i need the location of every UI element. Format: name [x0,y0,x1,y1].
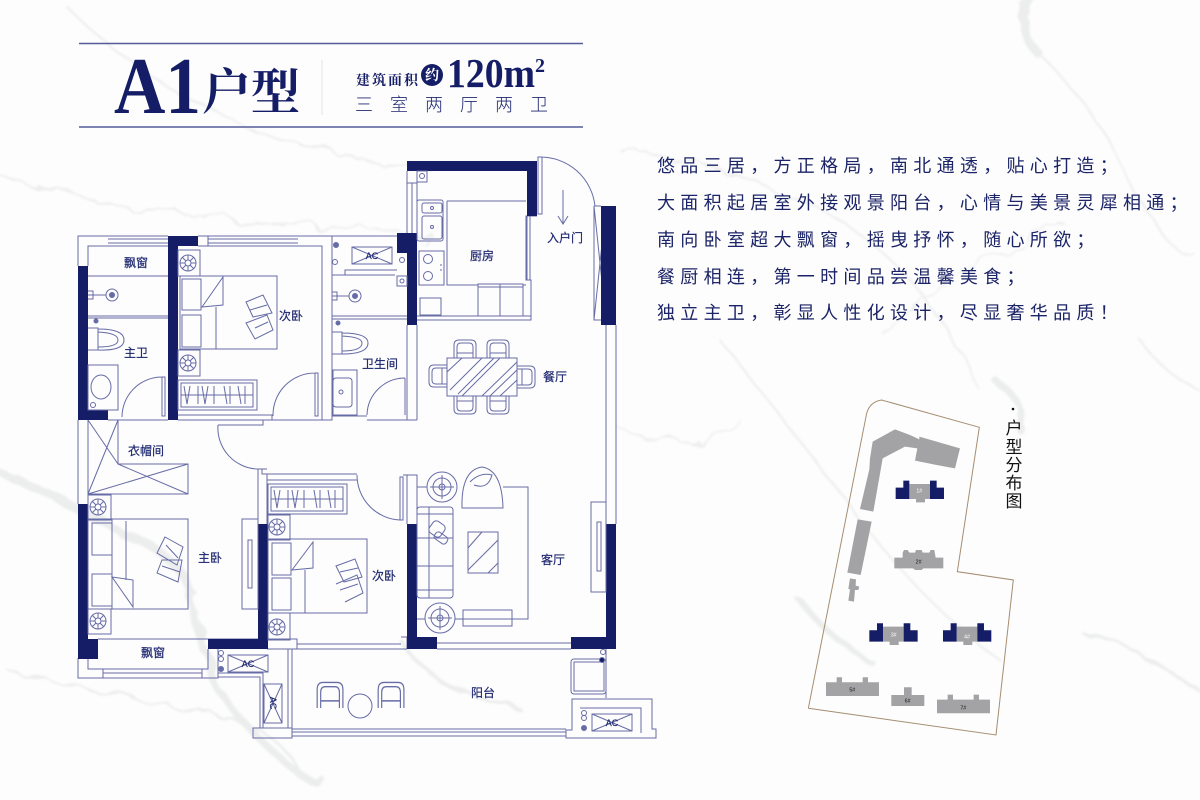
description text: 悠品三居，方正格局，南北通透，贴心打造； [657,156,1123,176]
bed: north bedroom [178,250,277,410]
building area label: 建筑面积 [356,72,420,89]
entry arrow [558,190,568,224]
heading: unit type: 户型 [202,65,300,120]
site plan caption: 户 [1006,419,1022,438]
site plan caption: 图 [1006,492,1022,511]
walk-in closet [88,420,188,494]
description text: 独立主卫，彰显人性化设计，尽显奢华品质！ [657,303,1123,323]
washer and AC units [218,650,632,731]
building 7: 7# [960,705,966,711]
room labels: 主卧 [198,551,222,565]
badge: approx: 约 [425,67,439,84]
room labels: 飘窗 [124,256,148,270]
title block [79,43,583,131]
building 5: 5# [849,688,855,694]
room labels: 阳台 [471,685,495,700]
building 4 [943,623,991,645]
doors [122,373,405,520]
room labels: 次卧 [279,309,303,323]
room labels: 主卫 [124,346,148,360]
room labels: 卫生间 [362,357,398,371]
room labels: AC [268,697,278,710]
building 7 [937,695,990,713]
second bathroom fixtures [332,242,407,415]
wall outlines [78,157,656,738]
living room furniture [417,467,606,633]
heading: A1: A1 [114,43,201,131]
building 2 [894,550,943,570]
building 1: 1# [916,489,922,495]
building 2: 2# [916,559,922,565]
room labels: 飘窗 [141,646,165,660]
building 4: 4# [964,635,970,641]
building 6: 6# [905,699,911,705]
site plan caption: 布 [1006,474,1022,493]
solid walls [78,161,616,659]
perimeter buildings [847,429,960,602]
room labels: 次卧 [372,569,396,583]
building 5 [826,677,879,696]
floor plan [78,157,656,738]
description text: 大面积起居室外接观景阳台，心情与美景灵犀相通； [657,193,1193,213]
bed: master bedroom [88,495,258,634]
building 6 [891,687,924,706]
bed: south bedroom [268,484,367,640]
area value: 120m [447,50,535,96]
room labels: 厨房 [470,248,494,263]
area value: 2 [535,55,545,77]
building 1 [896,481,944,502]
site plan caption: 分 [1006,456,1022,475]
balcony furniture [317,682,404,718]
room configuration: 三室两厅两卫 [355,95,565,115]
site plan [808,400,1013,735]
dining table [429,340,535,414]
description text: 南向卧室超大飘窗，摇曳抒怀，随心所欲； [657,230,1100,250]
room labels: AC [606,718,619,728]
description text [657,156,1193,323]
room labels: 餐厅 [543,369,567,384]
site boundary [808,400,1013,735]
site plan caption [1006,408,1022,511]
room labels: AC [242,659,255,669]
site plan caption: 型 [1006,438,1022,457]
building 3 [869,623,918,645]
room labels: AC [366,251,379,261]
room labels [124,230,619,728]
room labels: 入户门 [547,230,583,245]
room labels: 客厅 [541,552,565,567]
master bathroom fixtures [88,276,168,410]
building 3: 3# [891,633,897,639]
description text: 餐厨相连，第一时间品尝温馨美食； [657,267,1030,287]
kitchen fixtures [417,171,526,316]
badge: approx [421,64,443,86]
room labels: 衣帽间 [128,443,164,458]
